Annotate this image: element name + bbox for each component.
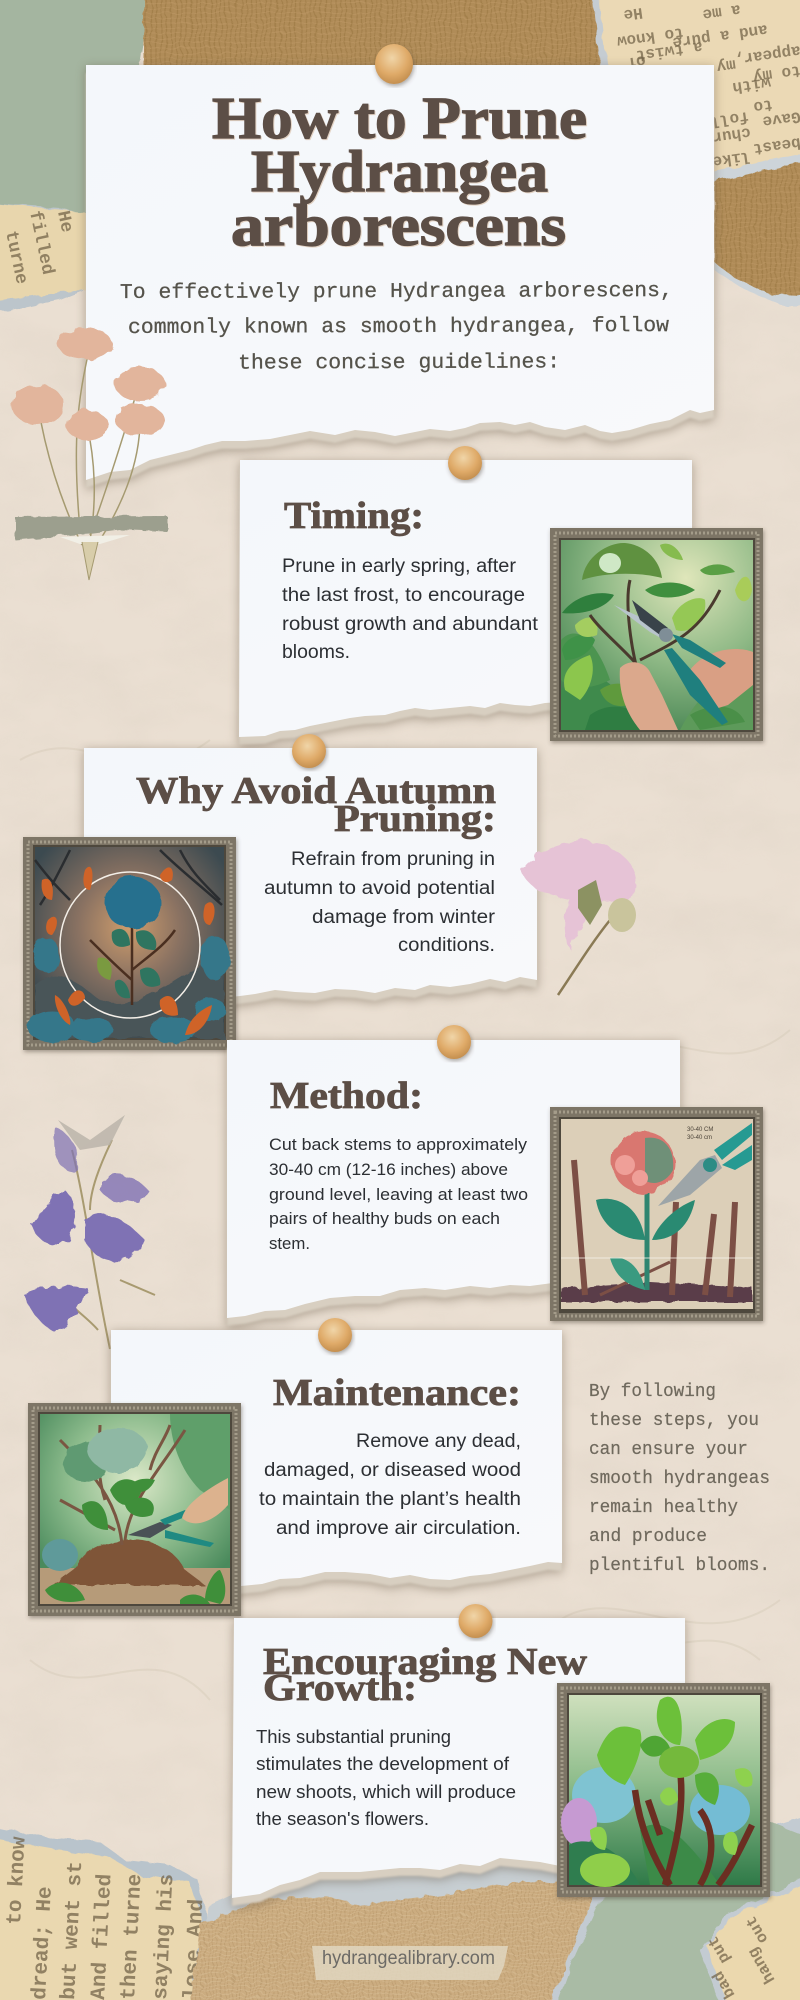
image frame: hydrangea in autumn	[23, 837, 236, 1050]
text: method body: pairs of healthy buds on each	[269, 1209, 500, 1228]
secateurs	[614, 605, 668, 642]
burlap: top	[144, 0, 606, 90]
flower head	[612, 1131, 674, 1193]
branches	[60, 1425, 185, 1545]
text: method body: 30-40 cm (12-16 inches) above	[269, 1160, 508, 1179]
heading: main title: arborescens	[231, 192, 566, 258]
panel: maintenance	[111, 1330, 562, 1586]
newspaper: top right: my	[715, 55, 737, 76]
text: autumn body: damage from winter	[312, 907, 496, 928]
newspaper: left: filled	[24, 209, 57, 277]
newspaper: top right: He	[622, 3, 644, 24]
pin: title	[375, 44, 413, 84]
bottom-left newspaper: but went st	[58, 1861, 88, 2000]
side foliage	[170, 1414, 230, 1510]
orange leaves	[42, 867, 215, 1035]
bottom-left newspaper: lose And	[181, 1898, 209, 2000]
panel: timing	[239, 460, 692, 737]
pin: timing	[448, 446, 482, 480]
flower stem and leaves	[644, 1190, 650, 1290]
blooms	[63, 1442, 107, 1482]
heading: Encouraging New Growth: Growth:	[263, 1667, 417, 1709]
image frame: pruning in spring	[550, 528, 763, 741]
text: autumn body: conditions.	[398, 935, 495, 956]
panel: method	[227, 1040, 680, 1318]
text: closing note: can ensure your	[589, 1440, 748, 1460]
blue bloom	[105, 877, 161, 929]
pin: maintenance	[318, 1318, 352, 1352]
left hand	[620, 662, 678, 730]
footer: website label on tape: hydrangealibrary.com	[322, 1948, 495, 1969]
newspaper: top right: church	[692, 123, 752, 149]
text: method body: stem.	[269, 1234, 310, 1253]
text: timing body: robust growth and abundant	[282, 614, 539, 635]
measurement label: 30-40 CM	[687, 1127, 713, 1133]
panel: why avoid autumn pruning	[84, 748, 537, 1000]
text: closing note: By following	[589, 1382, 716, 1402]
bottom burlap	[190, 1850, 610, 2000]
text: closing note: smooth hydrangeas	[589, 1469, 770, 1489]
newspaper: left: turne	[0, 229, 31, 286]
heading: Why Avoid Autumn Pruning: Pruning:	[334, 798, 496, 840]
heading: Timing: Timing:	[284, 495, 424, 537]
newspaper: top right: like	[711, 147, 752, 170]
panel: title	[86, 65, 714, 480]
green leaves	[97, 929, 160, 998]
cut branches	[635, 1770, 752, 1885]
hydrangea bushes	[572, 1767, 636, 1823]
text: closing note	[589, 1382, 770, 1576]
heading: Why Avoid Autumn Pruning	[136, 770, 496, 840]
text: encouraging body: This substantial pruning	[256, 1727, 451, 1747]
text: maintenance body: damaged, or diseased wood	[264, 1460, 521, 1481]
newspaper: top right: follow	[690, 107, 750, 133]
heading: Method: Method:	[270, 1075, 423, 1117]
heading: main title: How to Prune	[212, 85, 587, 151]
text: timing body	[282, 556, 539, 663]
bottom-left newspaper: saying his	[150, 1873, 180, 2000]
image frame: where to cut stems	[550, 1107, 763, 1321]
image frame: new shoots	[557, 1683, 770, 1897]
text: introduction: To effectively prune Hydrangea arborescens,	[120, 280, 673, 305]
text: encouraging body: stimulates the development of	[256, 1754, 510, 1774]
text: timing body: blooms.	[282, 642, 350, 663]
heading: Why Avoid Autumn Pruning: Why Avoid Autumn	[136, 770, 496, 812]
text: introduction: commonly known as smooth hydrangea, follow	[128, 315, 669, 340]
measurement label: 30-40 cm	[687, 1135, 712, 1141]
text: maintenance body	[259, 1431, 521, 1539]
cut stems	[574, 1160, 735, 1297]
tape	[15, 516, 167, 540]
pin: autumn	[292, 734, 326, 768]
heading: Encouraging New Growth	[263, 1641, 588, 1709]
text: method body: Cut back stems to approximately	[269, 1135, 528, 1154]
newspaper: top right: to	[752, 95, 774, 116]
right hand	[690, 649, 753, 710]
bottom-left newspaper: And filled	[88, 1873, 118, 2000]
text: introduction: these concise guidelines:	[238, 351, 560, 376]
newspaper: top right: a me	[701, 0, 742, 23]
branches	[590, 580, 720, 668]
flower: pink pressed rose	[521, 841, 637, 995]
leaves	[45, 1479, 225, 1604]
newspaper: left: He	[52, 209, 76, 234]
newspaper: top right	[592, 0, 800, 190]
heading: main title: Hydrangea	[251, 138, 548, 204]
panel: encouraging new growth	[232, 1618, 685, 1898]
flower: purple pressed larkspur	[24, 1115, 155, 1349]
text: encouraging body: new shoots, which will produce	[256, 1782, 516, 1802]
frost foliage	[35, 950, 224, 1038]
newspaper: top right: with	[731, 73, 772, 96]
text: autumn body: Refrain from pruning in	[291, 849, 495, 870]
bottom-right newspaper: put	[704, 1933, 734, 1966]
bottom-right newspaper: hang	[745, 1944, 779, 1986]
text: method body	[269, 1135, 528, 1253]
text: closing note: and produce	[589, 1527, 707, 1547]
newspaper: top right: of	[625, 51, 647, 72]
newspaper: top right: appear,	[733, 41, 800, 68]
bottom-left newspaper	[0, 1826, 209, 2000]
green paper: top left	[0, 0, 152, 218]
text: maintenance body: and improve air circulation.	[276, 1518, 521, 1539]
text: closing note: these steps, you	[589, 1411, 759, 1431]
bottom-left newspaper: then turne	[118, 1873, 148, 2000]
text: closing note: remain healthy	[589, 1498, 738, 1518]
stump	[55, 1540, 205, 1585]
shears	[658, 1155, 722, 1206]
newspaper: top right: and a pure	[671, 20, 769, 51]
text: closing note: plentiful blooms.	[589, 1556, 770, 1576]
shears	[128, 1522, 172, 1538]
text: method body: ground level, leaving at least two	[269, 1185, 528, 1204]
heading: main title	[212, 85, 587, 258]
text: maintenance body: Remove any dead,	[356, 1431, 521, 1452]
burlap: right	[714, 152, 800, 304]
text: autumn body: autumn to avoid potential	[264, 878, 495, 899]
text: timing body: the last frost, to encourage	[282, 585, 525, 606]
image frame: removing dead wood	[28, 1403, 241, 1616]
flower head	[582, 543, 662, 580]
newspaper: top right: a twist	[635, 37, 704, 64]
white ring	[60, 872, 200, 1018]
bottom-right green paper	[548, 1815, 800, 2000]
bottom-left newspaper: dread; He	[29, 1886, 58, 2000]
text: encouraging body	[256, 1727, 516, 1829]
text: autumn body	[264, 849, 496, 956]
flowers: dried peach umbels with tape	[12, 328, 167, 580]
bottom-right newspaper: out	[742, 1913, 772, 1946]
stem and branches	[90, 925, 175, 1005]
bright new leaves	[590, 1697, 753, 1855]
pin: encouraging	[458, 1604, 492, 1638]
table	[40, 1568, 230, 1604]
hand	[182, 1478, 228, 1523]
newspaper: left	[0, 203, 90, 314]
measurement label	[687, 1127, 713, 1141]
newspaper: top right: to know	[615, 23, 685, 50]
footer: website label on tape	[312, 1946, 508, 1980]
heading: Maintenance: Maintenance:	[273, 1372, 521, 1414]
bottom-left newspaper: to know	[4, 1836, 32, 1925]
text: timing body: Prune in early spring, after	[282, 556, 517, 577]
text: encouraging body: the season's flowers.	[256, 1809, 429, 1829]
ground	[561, 1282, 753, 1302]
heading: Encouraging New Growth: Encouraging New	[263, 1641, 588, 1683]
central bud	[659, 1746, 699, 1778]
text: introduction	[120, 280, 673, 376]
text: maintenance body: to maintain the plant’s health	[259, 1489, 521, 1510]
pin: method	[437, 1025, 471, 1059]
bottom-right newspaper	[700, 1875, 800, 2000]
